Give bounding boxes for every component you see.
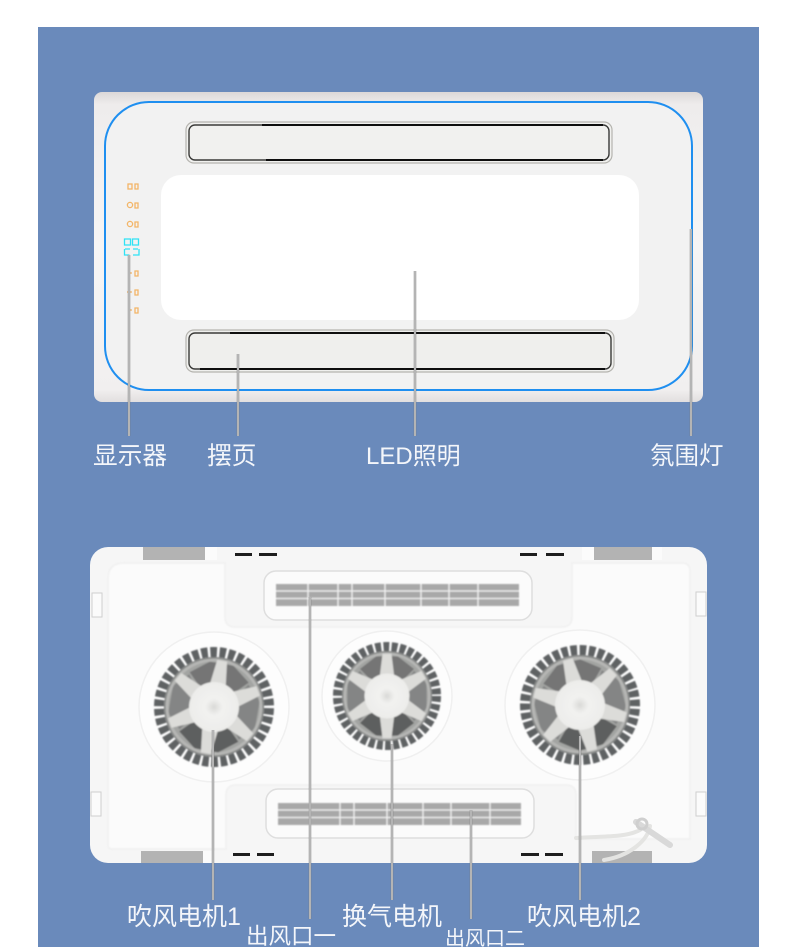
label: blower motor 1: 吹风电机1 — [127, 903, 241, 931]
label: ventilation motor: 换气电机 — [342, 903, 442, 931]
LED light panel — [161, 175, 639, 320]
label: ambient light: 氛围灯 — [650, 442, 724, 470]
blower motor 2 — [505, 630, 655, 780]
upper louvre — [186, 122, 612, 163]
upper air outlet — [264, 571, 532, 620]
lower louvre — [186, 330, 614, 372]
ventilation motor — [322, 631, 452, 761]
power cable — [576, 819, 670, 860]
panel: front of the heater — [94, 92, 703, 402]
label: louvre: 摆页 — [207, 442, 256, 470]
label: blower motor 2: 吹风电机2 — [527, 903, 641, 931]
lower air outlet — [266, 789, 534, 838]
icon: display indicators — [124, 184, 139, 313]
blower motor 1 — [139, 632, 289, 782]
panel: back of the heater — [90, 547, 707, 863]
label: LED lighting: LED照明 — [366, 443, 461, 470]
recessed back area — [108, 563, 690, 849]
label: display: 显示器 — [93, 443, 167, 470]
mounting tabs — [141, 547, 652, 863]
leader lines — [129, 229, 691, 919]
